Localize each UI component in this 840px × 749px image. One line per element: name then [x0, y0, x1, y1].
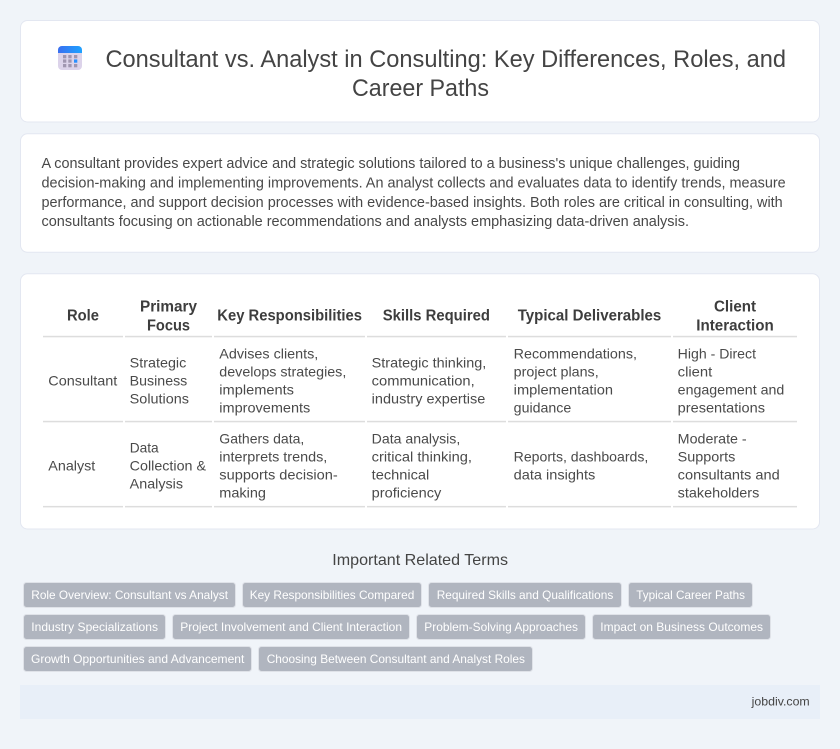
section: important related terms: [24, 552, 770, 672]
table row: Analyst: data insights: [514, 466, 595, 482]
panel: introduction: [20, 134, 820, 252]
table row: Consultant: Strategic thinking,: [372, 354, 486, 370]
tag: Required Skills: [428, 582, 622, 608]
table row: Analyst: critical thinking,: [372, 448, 472, 464]
tag: Problem-Solving: Problem-Solving Approaches: [424, 620, 578, 634]
table row: Consultant: client: [678, 363, 712, 379]
tag: Project Involvement: Project Involvement and Client Interaction: [180, 620, 402, 634]
table row: Analyst: stakeholders: [678, 484, 759, 500]
table row: Analyst: Gathers data,: [219, 430, 304, 446]
table row: Analyst: [43, 430, 797, 507]
table row: Consultant: presentations: [678, 399, 765, 415]
table row: Analyst: interprets trends,: [219, 448, 327, 464]
table row: Consultant: develops strategies,: [219, 363, 346, 379]
table header row: [43, 299, 797, 337]
table header row: Typical Deliverables: [518, 308, 661, 325]
tag: Role Overview: Role Overview: Consultant vs Analyst: [31, 588, 229, 602]
table header row: Client: [714, 299, 757, 316]
intro text: consultants focusing on actionable recommendations and analysts emphasizing data-driven analysis.: [42, 214, 689, 230]
tag: Role Overview: [24, 582, 236, 608]
table row: Analyst: technical: [372, 466, 429, 482]
intro text: performance, and support decision processes with evidence-based insights. Both roles are critical in consulting, with: [42, 195, 783, 211]
title: [106, 46, 786, 102]
footer bar: [20, 685, 820, 719]
table row: Consultant: implements: [219, 381, 294, 397]
table row: Consultant: engagement and: [678, 381, 784, 397]
table header row: Key Responsibilities: [217, 308, 362, 325]
tag: Required Skills: Required Skills and Qualifications: [437, 588, 613, 602]
tag: Impact on Business Outcomes: [592, 614, 770, 640]
intro text: A consultant provides expert advice and strategic solutions tailored to a business's unique challenges, guiding: [42, 156, 740, 172]
table row: Analyst: Supports: [678, 448, 735, 464]
panel: comparison table: [20, 274, 820, 529]
table row: Consultant: Consultant: [48, 372, 117, 388]
footer source: jobdiv.com: [751, 695, 810, 709]
tag: Industry Specializations: Industry Specializations: [31, 620, 158, 634]
tag: Choosing Between: [258, 646, 532, 672]
table row: Consultant: Strategic: [130, 354, 186, 370]
table header row: Role: [67, 308, 99, 325]
tag: Impact on Business Outcomes: Impact on Business Outcomes: [600, 620, 763, 634]
table header row: Focus: [147, 318, 190, 335]
table header row: Skills Required: [383, 308, 490, 325]
tag: Project Involvement: [172, 614, 410, 640]
tag: Key Responsibilities: Key Responsibilities Compared: [250, 588, 414, 602]
table row: Consultant: industry expertise: [372, 390, 486, 406]
table row: Consultant: improvements: [219, 399, 310, 415]
table row: Analyst: Analysis: [130, 475, 183, 491]
table row: Consultant: Solutions: [130, 390, 189, 406]
table row: Analyst: supports decision-: [219, 466, 338, 482]
tag: Typical Career Paths: Typical Career Paths: [636, 588, 745, 602]
table row: Analyst: proficiency: [372, 484, 441, 500]
title: Consultant vs. Analyst in Consulting: Key Differences, Roles, and: [106, 46, 786, 73]
title: Career Paths: [352, 75, 489, 102]
table row: Analyst: consultants and: [678, 466, 780, 482]
intro text: decision-making and implementing improvements. An analyst collects and evaluates data to identify trends, measure: [42, 175, 786, 191]
tag: Choosing Between: Choosing Between Consultant and Analyst Roles: [267, 652, 525, 666]
tag: Industry Specializations: [24, 614, 166, 640]
table row: Analyst: Analyst: [48, 457, 95, 473]
tag: Problem-Solving: [416, 614, 586, 640]
tag: Typical Career Paths: [628, 582, 752, 608]
table row: Analyst: Reports, dashboards,: [514, 448, 648, 464]
table row: Consultant: Advises clients,: [219, 345, 318, 361]
panel: title card: [20, 20, 820, 122]
table row: Consultant: guidance: [514, 399, 572, 415]
table row: Consultant: High - Direct: [678, 345, 756, 361]
related terms heading: Important Related Terms: [332, 552, 508, 569]
table row: Consultant: [43, 345, 797, 422]
tag: Key Responsibilities: [242, 582, 422, 608]
table row: Analyst: Collection &: [130, 457, 207, 473]
table row: Analyst: Data: [130, 439, 159, 455]
table row: Analyst: making: [219, 484, 266, 500]
table row: Consultant: implementation: [514, 381, 613, 397]
table row: Consultant: Recommendations,: [514, 345, 637, 361]
table row: Consultant: communication,: [372, 372, 475, 388]
icon: calendar: [58, 46, 82, 70]
table row: Analyst: Moderate -: [678, 430, 747, 446]
intro text: [42, 156, 786, 230]
table row: Consultant: project plans,: [514, 363, 599, 379]
tag: Growth Opportunities: Growth Opportunities and Advancement: [31, 652, 245, 666]
table header row: Primary: [140, 299, 197, 316]
table row: Consultant: Business: [130, 372, 187, 388]
tag: Growth Opportunities: [24, 646, 252, 672]
table row: Analyst: Data analysis,: [372, 430, 460, 446]
table header row: Interaction: [696, 318, 774, 335]
